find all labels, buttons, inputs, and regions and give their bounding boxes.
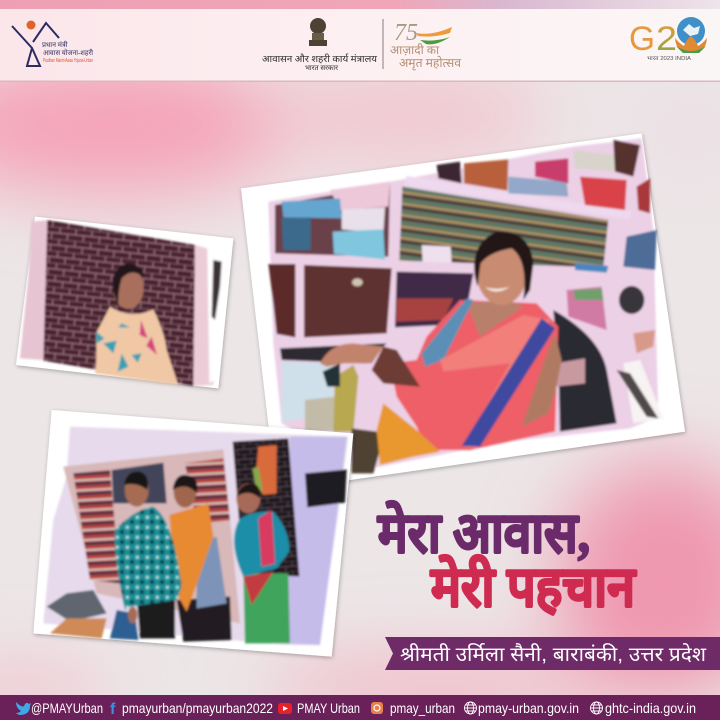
icon: house figure [12,20,59,66]
photo contents [43,427,348,645]
logo: PMAY Urban [12,20,93,66]
header divider [382,19,384,69]
icon: twitter [16,702,31,715]
photo contents [20,220,227,386]
icon: facebook: f [110,701,116,718]
name ribbon [385,637,720,670]
icon: globe with lotus [675,17,707,53]
ministry name [262,53,377,72]
footer bar [0,695,720,720]
photo frame [33,410,353,657]
photo: woman at sewing machine in shop (large) [241,133,685,497]
top strip [0,0,720,9]
ministry name: आवासन और शहरी कार्य मंत्रालय [262,53,377,65]
header band [0,9,720,82]
icon: globe [590,702,602,714]
icon: instagram [371,702,383,714]
photo frame [16,217,233,388]
logo: Azadi ka Amrit Mahotsav [390,20,462,71]
logo wording [42,40,93,64]
footer site: pmay-urban: pmay-urban.gov.in [478,700,579,716]
icon: youtube [278,703,292,714]
title: line two: मेरी पहचान [430,554,637,619]
icon: globe [464,702,476,714]
logo: ministry emblem and name [262,18,377,72]
photo: family in front of shop shelves (lower left) [33,410,353,657]
logo: G20 [629,17,707,62]
title: line one: मेरा आवास, [377,500,590,565]
logo wording: Pradhan Mantri Awas Yojana-Urban [43,58,93,64]
footer handle: instagram: pmay_urban [390,700,455,716]
photo frame [241,133,685,497]
footer handle: youtube: PMAY Urban [297,700,360,716]
logo: Azadi ka Amrit Mahotsav: 75 [394,20,418,46]
icon: flag swoosh [416,27,452,44]
logo: G20: भारत 2023 INDIA [647,56,691,62]
logo wording: आवास योजना-शहरी [43,48,93,57]
photo: woman against brick wall (small, left) [16,217,233,388]
footer handle: twitter: @PMAYUrban [31,700,103,716]
footer handle: facebook: pmayurban/pmayurban2022 [122,700,273,716]
logo: G20: 2 [656,20,677,58]
logo wording: प्रधान मंत्री [42,40,68,49]
logo: Azadi ka Amrit Mahotsav: अमृत महोत्सव [399,55,462,71]
name ribbon: श्रीमती उर्मिला सैनी, बाराबंकी, उत्तर प्रदेश [400,643,706,666]
photo contents [268,138,663,473]
logo: Azadi ka Amrit Mahotsav: आज़ादी का [390,43,440,57]
icon: national emblem [309,18,327,46]
footer site: ghtc-india: ghtc-india.gov.in [605,700,696,716]
logo: G20: G [629,20,655,58]
ministry name: भारत सरकार [305,64,338,72]
